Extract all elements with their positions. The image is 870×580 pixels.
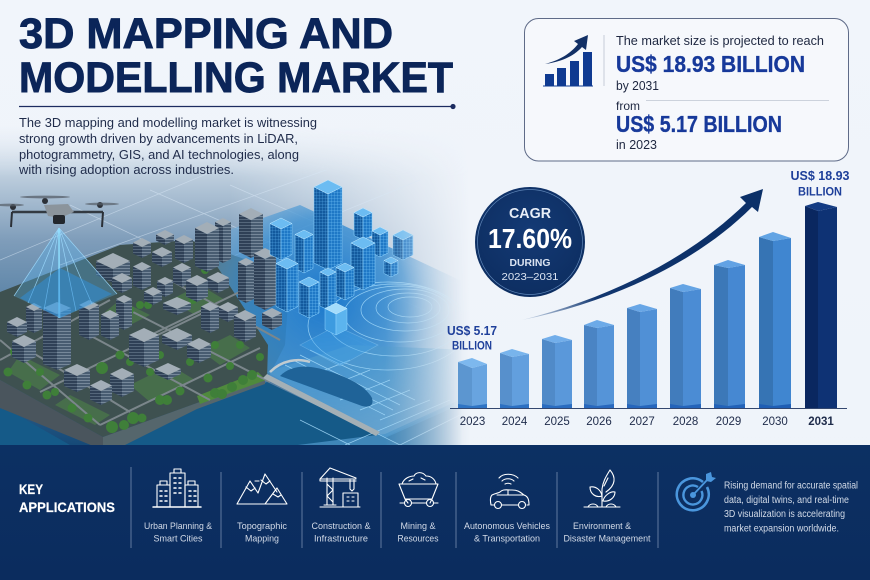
bar chart: market growth 2023-2031 bbox=[450, 202, 847, 428]
bar 2026 bbox=[584, 320, 614, 408]
icon: growth chart bbox=[543, 35, 593, 86]
bar 2030 bbox=[759, 232, 791, 408]
year labels: 2028 bbox=[673, 416, 698, 428]
arrow: growth trend bbox=[522, 189, 763, 320]
year labels: 2031 bbox=[808, 416, 834, 428]
bar 2028 bbox=[670, 284, 701, 408]
application: urban planning: Smart Cities bbox=[154, 534, 203, 544]
bar 2023 bbox=[458, 358, 487, 408]
label: 2023 value: BILLION bbox=[452, 338, 492, 352]
digital twin ground bbox=[218, 205, 451, 412]
intro paragraph bbox=[18, 115, 317, 177]
application: construction: Construction & bbox=[312, 521, 371, 532]
application: urban planning bbox=[144, 469, 213, 544]
icon: city buildings bbox=[153, 469, 201, 507]
heading: key applications bbox=[19, 482, 115, 515]
blueprint platform bbox=[267, 345, 470, 438]
cliff bbox=[0, 380, 103, 450]
label: 2031 value bbox=[790, 169, 850, 198]
closing statement: data, digital twins, and real-time bbox=[724, 495, 849, 506]
title rule bbox=[19, 104, 456, 109]
application: topographic mapping bbox=[237, 474, 287, 544]
base value text: in 2023 bbox=[616, 138, 657, 152]
projected value text: US$ 18.93 BILLION bbox=[616, 51, 805, 77]
contour lines bbox=[285, 282, 468, 445]
rocky shore bbox=[103, 380, 265, 445]
water bbox=[0, 382, 385, 446]
illustration: 3D city with drone scan and digital twin bbox=[0, 160, 470, 450]
title: MODELLING MARKET bbox=[19, 54, 453, 102]
intro paragraph: The 3D mapping and modelling market is witnessing bbox=[19, 115, 317, 130]
panel: key applications band bbox=[0, 445, 870, 580]
application: topographic mapping: Topographic bbox=[237, 521, 287, 532]
application: construction bbox=[312, 468, 371, 544]
CAGR badge: 17.60% bbox=[488, 223, 572, 254]
application: construction: Infrastructure bbox=[314, 534, 368, 544]
year labels bbox=[460, 416, 834, 428]
year labels: 2024 bbox=[502, 416, 528, 428]
label: 2023 value bbox=[447, 324, 497, 352]
application: autonomous vehicles: & Transportation bbox=[474, 534, 540, 544]
year labels: 2030 bbox=[762, 416, 788, 428]
application: urban planning: Urban Planning & bbox=[144, 521, 213, 532]
intro paragraph: strong growth driven by advancements in LiDAR, bbox=[19, 131, 298, 146]
year labels: 2029 bbox=[716, 416, 741, 428]
intro paragraph: with rising adoption across industries. bbox=[18, 162, 234, 177]
icon: connected car bbox=[490, 474, 529, 508]
label: 2023 value: US$ 5.17 bbox=[447, 324, 497, 338]
closing statement: 3D visualization is accelerating bbox=[724, 509, 845, 520]
year labels: 2023 bbox=[460, 416, 485, 428]
panel: market size callout bbox=[524, 18, 848, 161]
bar 2025 bbox=[542, 335, 572, 408]
icon: mountains bbox=[237, 474, 287, 504]
application: autonomous vehicles bbox=[464, 474, 550, 544]
application: mining: Mining & bbox=[400, 521, 436, 532]
icon: crane bbox=[320, 468, 360, 507]
bar 2029 bbox=[714, 260, 745, 408]
closing statement: market expansion worldwide. bbox=[724, 524, 839, 534]
CAGR badge: 2023–2031 bbox=[502, 271, 559, 283]
application: environment: Disaster Management bbox=[564, 534, 651, 544]
bar 2031 bbox=[805, 202, 837, 408]
green lots bbox=[8, 285, 250, 425]
bay bbox=[280, 367, 373, 407]
closing statement bbox=[724, 480, 858, 534]
bar 2027 bbox=[627, 304, 657, 408]
intro paragraph: photogrammetry, GIS, and AI technologies, along bbox=[19, 147, 299, 162]
projected value text bbox=[616, 33, 824, 93]
heading: key applications: APPLICATIONS bbox=[19, 500, 115, 515]
park shore bbox=[197, 372, 266, 404]
drone bbox=[0, 196, 119, 227]
heading: key applications: KEY bbox=[19, 482, 43, 497]
title: 3D MAPPING AND bbox=[19, 10, 393, 58]
CAGR badge: CAGR bbox=[509, 206, 552, 222]
year labels: 2026 bbox=[586, 416, 612, 428]
application: environment: Environment & bbox=[573, 521, 632, 532]
trees bbox=[4, 266, 264, 433]
bridge bbox=[263, 360, 380, 436]
icon: mine cart bbox=[399, 473, 438, 506]
projected value text: The market size is projected to reach bbox=[616, 33, 824, 48]
application: topographic mapping: Mapping bbox=[245, 534, 279, 544]
icon: target with arrow bbox=[677, 472, 716, 510]
gray city buildings bbox=[7, 208, 282, 405]
CAGR badge bbox=[475, 187, 585, 297]
application: autonomous vehicles: Autonomous Vehicles bbox=[464, 521, 550, 532]
roads bbox=[0, 270, 285, 425]
label: 2031 value: US$ 18.93 bbox=[790, 169, 850, 183]
label: 2031 value: BILLION bbox=[798, 184, 842, 198]
CAGR badge: DURING bbox=[510, 257, 550, 269]
year labels: 2027 bbox=[629, 416, 655, 428]
base value text bbox=[616, 99, 782, 152]
base value text: from bbox=[616, 99, 640, 113]
blueprint water bbox=[298, 406, 458, 445]
year labels: 2025 bbox=[544, 416, 570, 428]
application: environment bbox=[564, 470, 651, 544]
blue wireframe buildings bbox=[270, 180, 413, 366]
bar 2024 bbox=[500, 349, 529, 408]
application: mining: Resources bbox=[398, 534, 439, 544]
icon: plant bbox=[584, 470, 620, 507]
drone scan beam bbox=[14, 228, 117, 318]
title bbox=[19, 10, 453, 102]
city ground bbox=[0, 240, 290, 437]
base value text: US$ 5.17 BILLION bbox=[616, 111, 782, 137]
application: mining bbox=[398, 473, 439, 544]
projected value text: by 2031 bbox=[616, 79, 659, 93]
